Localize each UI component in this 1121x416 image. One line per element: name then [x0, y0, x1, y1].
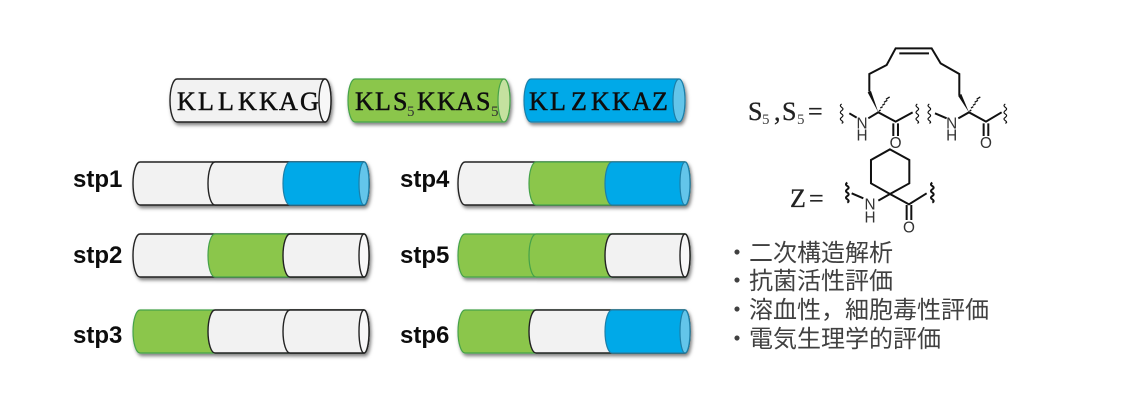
row: stp6: [400, 310, 690, 353]
label: stp2: stp2: [73, 242, 122, 269]
cylinder: KLZKKAZ: KLZKKAZ: [529, 87, 668, 116]
cylinder: stp3 green white white: [133, 310, 369, 353]
row: stp3: [73, 310, 369, 353]
chemical structure: S5,S5 stapled residues: N: [946, 116, 957, 133]
chemical structure: Z cyclohexyl residue: [846, 149, 934, 237]
cylinder: KLS5KKAS5: KKAS: [417, 87, 490, 116]
equation label: S5,S5 =: 5: [762, 112, 770, 128]
cylinder: KLS5KKAS5: 5: [491, 104, 498, 120]
equation label: S5,S5 =: 5: [797, 112, 804, 128]
row: stp4: [400, 162, 690, 205]
chemical structure: S5,S5 stapled residues: O: [980, 135, 992, 152]
cylinder: KLLKKAG: KLLKKAG: [177, 87, 319, 116]
chemical structure: Z cyclohexyl residue: H: [864, 210, 876, 227]
equation label: S5,S5 =: ,S: [774, 97, 796, 126]
equation label: Z =: Z=: [790, 184, 824, 213]
cylinder: KLLKKAG: [170, 79, 331, 122]
cylinder: stp5 green green white: [458, 234, 690, 277]
row: stp1: [73, 162, 369, 205]
cylinder: stp1 white white blue: [133, 162, 369, 205]
label: stp5: stp5: [400, 242, 449, 269]
list: evaluation items: ・電気生理学的評価: [725, 326, 941, 353]
row: stp2: [73, 234, 369, 277]
equation label: S5,S5 =: [748, 97, 823, 128]
chemical structure: Z cyclohexyl residue: O: [903, 220, 915, 237]
cylinder: KLS5KKAS5: 5: [407, 104, 414, 120]
label: stp3: stp3: [73, 322, 122, 349]
list: evaluation items: ・二次構造解析: [725, 240, 893, 267]
list: evaluation items: [725, 240, 989, 353]
cylinder: KLZKKAZ: [524, 79, 685, 122]
cylinder: stp4 white green blue: [458, 162, 690, 205]
cylinder: KLS5KKAS5: KLS: [355, 87, 407, 116]
label: stp6: stp6: [400, 322, 449, 349]
cylinder: KLS5KKAS5: [348, 79, 510, 122]
cylinder: stp6 green white blue: [458, 310, 690, 353]
chemical structure: S5,S5 stapled residues: N: [856, 116, 868, 133]
list: evaluation items: ・溶血性，細胞毒性評価: [725, 297, 989, 324]
label: stp1: stp1: [73, 166, 122, 193]
label: stp4: stp4: [400, 166, 450, 193]
equation label: S5,S5 =: S: [748, 97, 762, 126]
list: evaluation items: ・抗菌活性評価: [725, 268, 893, 295]
cylinder: stp2 white green white: [133, 234, 369, 277]
row: stp5: [400, 234, 690, 277]
chemical structure: S5,S5 stapled residues: O: [890, 135, 902, 152]
chemical structure: S5,S5 stapled residues: [840, 48, 1007, 152]
chemical structure: Z cyclohexyl residue: N: [864, 196, 876, 213]
chemical structure: S5,S5 stapled residues: H: [856, 128, 868, 145]
equation label: S5,S5 =: =: [808, 97, 823, 126]
chemical structure: S5,S5 stapled residues: H: [946, 128, 957, 145]
